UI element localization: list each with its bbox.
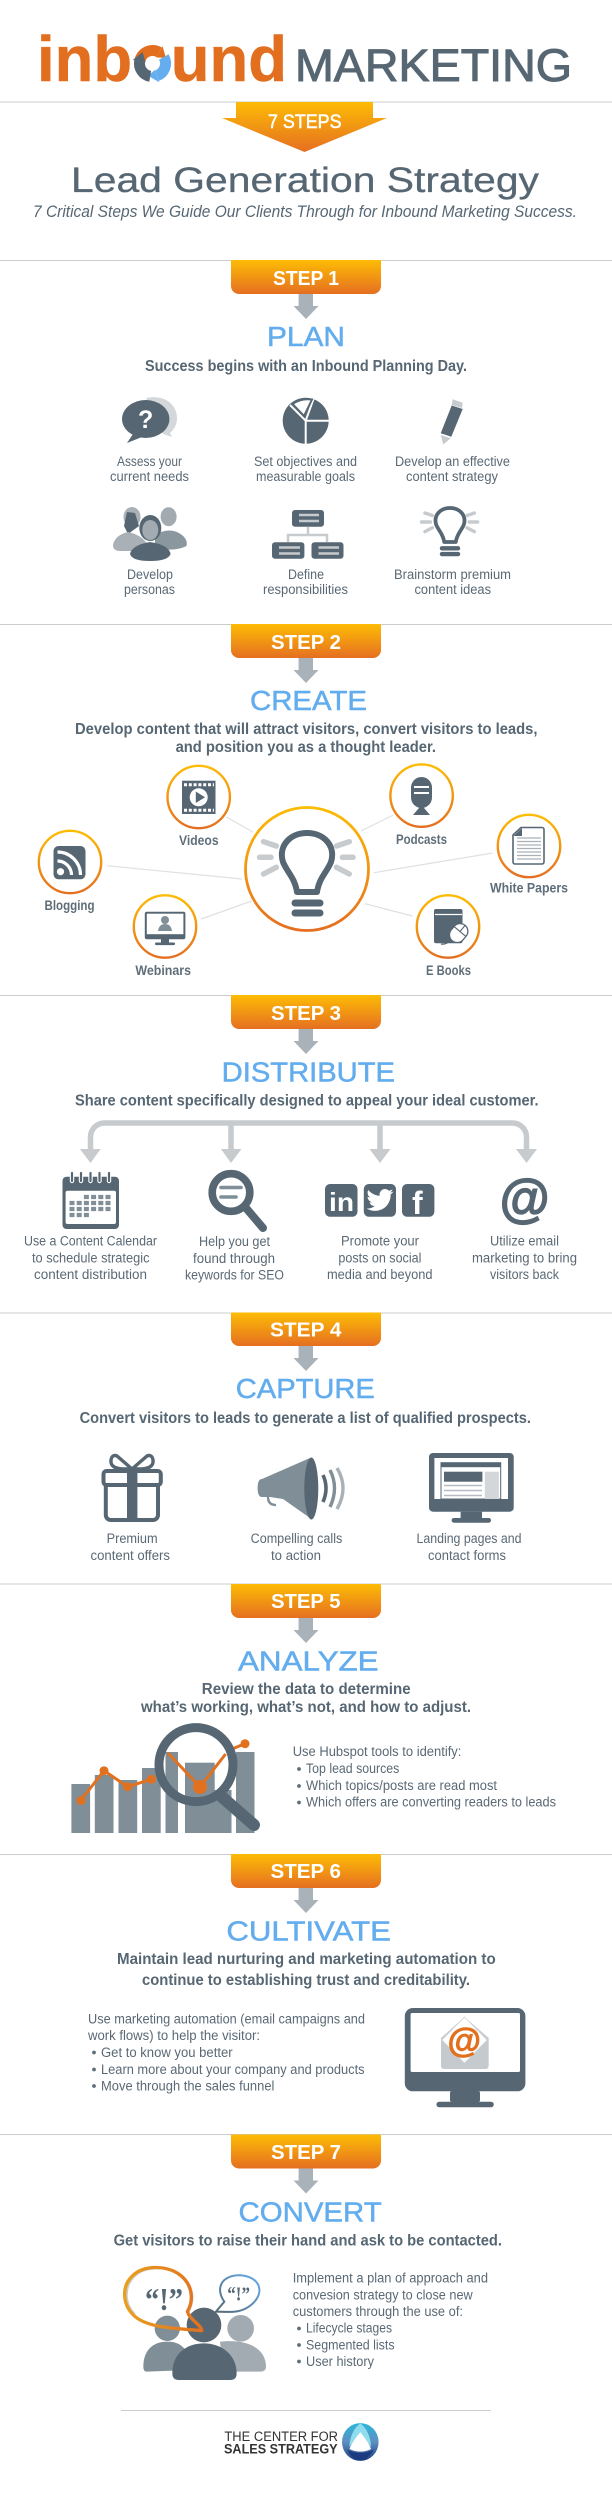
header logo: inbound marketing: inbound	[37, 23, 287, 95]
node: e books	[417, 895, 479, 978]
text: email marketing	[472, 1234, 577, 1282]
text: premium content offers	[90, 1531, 170, 1563]
text: email marketing: Utilize email	[490, 1234, 559, 1249]
heading: capture: CAPTURE	[236, 1373, 375, 1404]
icon: landing page monitor	[429, 1453, 514, 1523]
text: keywords for seo	[185, 1234, 284, 1282]
text: premium content offers: content offers	[90, 1548, 170, 1563]
plan intro: Success begins with an Inbound Planning Day.	[145, 358, 467, 375]
text: set objectives	[254, 454, 357, 484]
icon: personas	[113, 507, 187, 561]
heading: analyze: ANALYZE	[238, 1646, 379, 1677]
icon: at sign: @	[500, 1169, 550, 1228]
node: blogging	[39, 831, 101, 913]
cultivate intro	[117, 1951, 496, 1989]
central light bulb	[246, 808, 368, 930]
step 7 banner: STEP 7	[271, 2142, 341, 2164]
text: keywords for seo: found through	[193, 1251, 275, 1266]
step 1 banner: STEP 1	[273, 268, 339, 290]
capture intro: Convert visitors to leads to generate a list of qualified prospects.	[80, 1410, 531, 1427]
text: marketing automation list	[87, 2012, 365, 2094]
icon: small light bulb	[422, 508, 478, 554]
node: videos: Videos	[179, 833, 219, 848]
text: premium content offers: Premium	[107, 1531, 158, 1546]
text: compelling calls	[251, 1531, 343, 1563]
arrow: step 6 down	[294, 1888, 318, 1913]
icon: email monitor	[405, 2008, 525, 2107]
panel: step 4 capture	[80, 1312, 531, 1563]
text: content calendar	[24, 1234, 157, 1282]
text: assess your current needs	[110, 454, 189, 484]
chart: bars and magnifier	[71, 1728, 255, 1833]
branching arrows	[80, 1123, 537, 1163]
footer logo: the center for sales strategy: SALES STRATEGY	[224, 2441, 338, 2456]
text: promote: posts on social	[338, 1251, 421, 1266]
icon: social media	[325, 1184, 434, 1221]
text: assess your current needs: Assess your	[117, 454, 182, 469]
text: plan of approach list: Implement a plan of approach and	[293, 2270, 488, 2285]
subtitle: 7 Critical Steps We Guide Our Clients Through for Inbound Marketing Success.	[33, 202, 577, 221]
text: hubspot tools list: Use Hubspot tools to identify:	[293, 1744, 461, 1759]
text: landing pages	[416, 1531, 522, 1563]
text: landing pages: Landing pages and	[416, 1531, 522, 1546]
text: compelling calls: Compelling calls	[251, 1531, 343, 1546]
node: podcasts	[390, 764, 453, 847]
heading: distribute: DISTRIBUTE	[222, 1057, 395, 1088]
text: develop personas: Develop	[127, 567, 173, 582]
text: plan of approach list: customers through the use of:	[293, 2304, 463, 2319]
analyze intro: Review the data to determine	[202, 1681, 411, 1698]
text: content strategy: Develop an effective	[395, 454, 510, 469]
text: promote: media and beyond	[327, 1267, 432, 1282]
step 3 banner	[231, 995, 381, 1029]
analyze intro	[140, 1681, 471, 1716]
text: marketing automation list: Use marketing automation (email campaigns and	[88, 2012, 365, 2027]
text: content calendar: to schedule strategic	[32, 1251, 150, 1266]
node: white papers	[490, 815, 568, 896]
text: email marketing: visitors back	[490, 1267, 559, 1282]
convert intro: Get visitors to raise their hand and ask to be contacted.	[114, 2233, 502, 2250]
text: content strategy	[395, 454, 510, 484]
text: marketing automation list: Move through the sales funnel	[101, 2079, 274, 2094]
step 6 banner: STEP 6	[270, 1861, 341, 1883]
panel: step 5 analyze	[71, 1584, 556, 1833]
text: develop personas: personas	[124, 582, 175, 597]
icon: gift	[104, 1456, 161, 1521]
step 2 banner: STEP 2	[271, 632, 341, 654]
text: hubspot tools list	[293, 1744, 556, 1810]
text: set objectives: measurable goals	[256, 469, 355, 484]
text: hubspot tools list: Top lead sources	[306, 1761, 400, 1776]
text: plan of approach list	[293, 2270, 488, 2369]
step 3 banner: STEP 3	[271, 1003, 341, 1025]
arrow: step 1 down	[294, 294, 318, 319]
panel: step 3 distribute	[24, 995, 577, 1282]
icon: pencil	[441, 399, 463, 444]
text: plan of approach list: Lifecycle stages	[306, 2321, 392, 2336]
text: plan of approach list: User history	[306, 2354, 374, 2369]
text: plan of approach list: Segmented lists	[306, 2337, 395, 2352]
text: brainstorm: Brainstorm premium	[394, 567, 511, 582]
illustration: people with speech bubbles: “!”	[227, 2284, 250, 2306]
illustration: people with speech bubbles	[125, 2268, 266, 2380]
create intro: Develop content that will attract visitors, convert visitors to leads,	[75, 721, 538, 738]
footer logo: the center for sales strategy	[224, 2423, 379, 2461]
text: define responsibilities: Define	[288, 567, 324, 582]
text: content strategy: content strategy	[406, 469, 498, 484]
panel: step 7 convert	[114, 2134, 502, 2380]
banner arrow: 7 steps	[222, 102, 387, 152]
text: promote: Promote your	[341, 1234, 419, 1249]
node: videos	[168, 766, 230, 848]
text: define responsibilities	[263, 567, 348, 597]
step 1 banner	[231, 260, 381, 294]
step 6 banner	[231, 1854, 381, 1888]
text: marketing automation list: Get to know you better	[101, 2045, 233, 2060]
arrow: step 4 down	[294, 1346, 318, 1371]
arrow: step 5 down	[294, 1618, 318, 1643]
text: keywords for seo: keywords for SEO	[185, 1268, 284, 1282]
node: podcasts: Podcasts	[396, 832, 447, 847]
text: set objectives: Set objectives and	[254, 454, 357, 469]
text: marketing automation list: Learn more about your company and products	[101, 2062, 365, 2077]
main title: Lead Generation Strategy	[71, 160, 539, 200]
icon: magnifier	[212, 1174, 263, 1228]
heading: cultivate: CULTIVATE	[226, 1916, 391, 1947]
text: develop personas	[124, 567, 175, 597]
cultivate intro: continue to establishing trust and creditability.	[142, 1972, 470, 1989]
icon: pie chart	[283, 398, 330, 445]
node: webinars: Webinars	[135, 963, 191, 978]
panel: step 2 create	[39, 624, 568, 978]
header logo: inbound marketing	[37, 23, 572, 95]
text: brainstorm: content ideas	[414, 582, 491, 597]
arrow: step 3 down	[294, 1029, 318, 1054]
text: plan of approach list: convesion strategy to close new	[293, 2287, 473, 2302]
text: email marketing: marketing to bring	[472, 1251, 577, 1266]
icon: calendar	[62, 1173, 119, 1229]
illustration: people with speech bubbles: “!”	[145, 2281, 183, 2317]
analyze intro: what’s working, what’s not, and how to adjust.	[140, 1699, 471, 1716]
arrow: step 7 down	[294, 2168, 318, 2194]
text: define responsibilities: responsibilities	[263, 582, 348, 597]
icon: question bubbles: ?	[138, 406, 153, 434]
text: content calendar: content distribution	[34, 1267, 147, 1282]
heading: create: CREATE	[250, 685, 367, 716]
create intro: and position you as a thought leader.	[176, 739, 436, 756]
step 5 banner: STEP 5	[271, 1591, 340, 1613]
text: compelling calls: to action	[271, 1548, 321, 1563]
text: hubspot tools list: Which topics/posts are read most	[306, 1778, 497, 1793]
cultivate intro: Maintain lead nurturing and marketing automation to	[117, 1951, 496, 1968]
connector lines	[107, 815, 493, 919]
node: e books: E Books	[426, 963, 471, 978]
footer logo: the center for sales strategy: THE CENTER FOR	[224, 2429, 338, 2444]
icon: email monitor: @	[448, 2022, 481, 2060]
text: marketing automation list: work flows) to help the visitor:	[87, 2028, 260, 2043]
text: promote	[327, 1234, 432, 1282]
node: webinars	[134, 895, 196, 978]
text: brainstorm	[394, 567, 511, 597]
arrow: step 2 down	[294, 658, 318, 683]
text: assess your current needs: current needs	[110, 469, 189, 484]
icon: org chart	[272, 510, 344, 559]
icon: social media: in	[329, 1187, 354, 1217]
heading: plan: PLAN	[267, 321, 345, 352]
icon: question bubbles	[122, 397, 177, 443]
text: keywords for seo: Help you get	[199, 1234, 270, 1249]
header logo: inbound marketing: MARKETING	[295, 40, 572, 91]
create intro	[75, 721, 538, 756]
node: white papers: White Papers	[490, 881, 568, 896]
text: content calendar: Use a Content Calendar	[24, 1234, 157, 1249]
icon: social media: f	[412, 1185, 423, 1221]
text: hubspot tools list: Which offers are converting readers to leads	[306, 1795, 556, 1810]
text: landing pages: contact forms	[428, 1548, 506, 1563]
step 7 banner	[231, 2134, 381, 2168]
step 2 banner	[231, 624, 381, 658]
step 4 banner: STEP 4	[270, 1320, 342, 1342]
panel: step 6 cultivate	[87, 1854, 525, 2107]
distribute intro: Share content specifically designed to appeal your ideal customer.	[75, 1093, 539, 1110]
node: blogging: Blogging	[44, 898, 94, 913]
heading: convert: CONVERT	[238, 2197, 382, 2228]
banner arrow: 7 steps: 7 STEPS	[268, 112, 342, 133]
step 5 banner	[231, 1584, 381, 1618]
icon: megaphone	[258, 1458, 343, 1520]
panel: step 1 plan	[110, 260, 511, 597]
step 4 banner	[231, 1312, 381, 1346]
